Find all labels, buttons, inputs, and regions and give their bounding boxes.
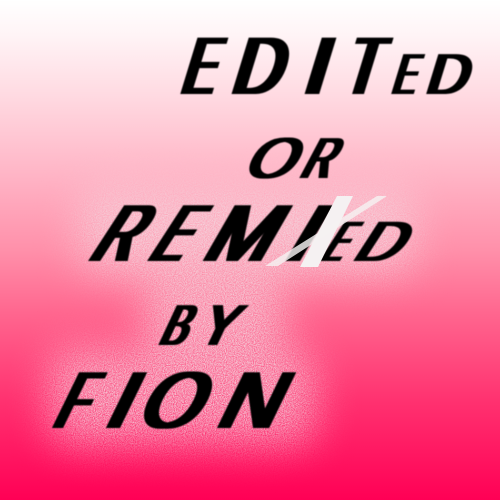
heading: EDIT: T	[336, 21, 396, 112]
word: OR	[235, 125, 354, 191]
white X of REMIX	[265, 196, 387, 267]
heading: EDIT: D	[224, 21, 301, 112]
word: OR: R	[292, 127, 354, 191]
heading suffix: ED: E	[387, 43, 428, 107]
heading: EDIT: I	[295, 20, 346, 112]
name: FION	[43, 355, 308, 446]
name: FION: O	[126, 355, 230, 445]
word: REMI	[76, 188, 348, 279]
word: REMI: E	[135, 188, 225, 279]
word: BY	[151, 293, 253, 358]
word: REMI: I	[270, 189, 348, 279]
word: OR: O	[235, 125, 318, 191]
word: REMI: M	[189, 188, 306, 279]
word suffix: ED: D	[343, 209, 429, 273]
heading: EDIT: E	[175, 20, 233, 112]
word: REMI: R	[76, 188, 174, 279]
name: FION: I	[94, 355, 160, 445]
heading suffix: ED: D	[420, 43, 481, 107]
heading suffix: ED	[387, 43, 481, 107]
grainy glow behind text	[20, 176, 434, 477]
heading: EDIT	[175, 20, 396, 112]
word suffix: ED: E	[311, 211, 371, 274]
name: FION: N	[205, 355, 308, 446]
word: BY: Y	[189, 294, 253, 358]
word: BY: B	[151, 293, 207, 358]
name: FION: F	[43, 356, 114, 446]
